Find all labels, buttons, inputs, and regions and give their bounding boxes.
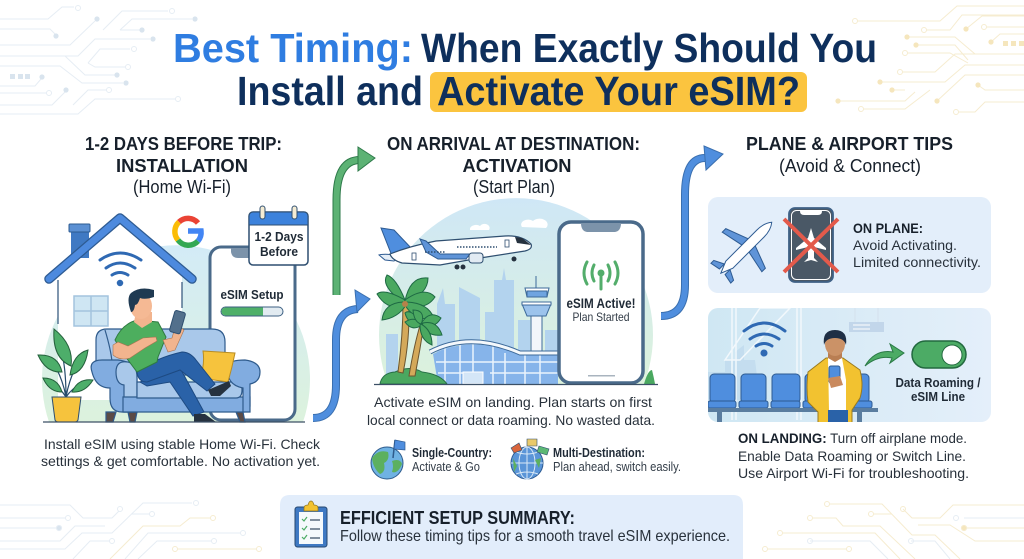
text: installation description: settings & get comfortable. No activation yet. bbox=[41, 453, 320, 469]
text: multi-destination: Multi-Destination: bbox=[553, 446, 645, 460]
heading: installation column: INSTALLATION bbox=[116, 156, 248, 176]
phone: eSIM active: eSIM Active! bbox=[566, 296, 636, 311]
arrow: green curve to toggle bbox=[865, 344, 904, 366]
panel: on plane: Limited connectivity. bbox=[853, 254, 981, 270]
text: on landing description: Use Airport Wi-Fi for troubleshooting. bbox=[738, 465, 969, 481]
icon: phone crossed out bbox=[784, 208, 838, 282]
panel: efficient setup summary: EFFICIENT SETUP SUMMARY: bbox=[340, 508, 575, 528]
icon: clipboard checklist bbox=[295, 501, 327, 547]
title: Best Timing: bbox=[173, 25, 413, 71]
heading: activation column: ON ARRIVAL AT DESTINATION: bbox=[387, 134, 640, 154]
panel: on landing: Data Roaming / bbox=[896, 376, 981, 390]
text: multi-destination: Plan ahead, switch easily. bbox=[553, 460, 681, 474]
text: single-country: Single-Country: bbox=[412, 446, 492, 460]
airport tower bbox=[522, 276, 551, 360]
heading: plane and airport tips column: PLANE & AIRPORT TIPS bbox=[746, 134, 953, 154]
text: activation description: local connect or data roaming. No wasted data. bbox=[367, 412, 655, 428]
panel: on landing: eSIM Line bbox=[911, 390, 965, 404]
palm trees and bushes bbox=[377, 275, 655, 384]
icon: wifi bbox=[744, 323, 785, 356]
text: installation description: Install eSIM using stable Home Wi-Fi. Check bbox=[44, 436, 321, 452]
text: on landing description bbox=[738, 430, 969, 481]
title: Activate Your eSIM? bbox=[437, 68, 800, 114]
text: activation description bbox=[367, 394, 655, 428]
panel: on plane: ON PLANE: bbox=[853, 220, 923, 236]
title: Install and bbox=[237, 68, 423, 114]
illustration: home installation scene bbox=[38, 206, 310, 422]
heading: activation column: ACTIVATION bbox=[462, 156, 572, 176]
illustration: airport arrival scene bbox=[374, 198, 658, 384]
phone: eSIM setup bbox=[210, 247, 295, 420]
icon: signal antenna bbox=[584, 262, 618, 289]
icon: yellow pillow bbox=[200, 351, 235, 382]
person sitting with phone bbox=[113, 289, 231, 422]
icon: Google G logo bbox=[175, 218, 201, 245]
plant in yellow pot bbox=[38, 329, 93, 422]
panel: on plane: Avoid Activating. bbox=[853, 237, 957, 253]
person with phone bbox=[807, 330, 862, 424]
icon: airplane bbox=[701, 202, 792, 293]
phone: eSIM setup: eSIM Setup bbox=[220, 287, 284, 302]
icon: calendar 1-2 days before bbox=[249, 206, 308, 265]
arrow: blue to arrival scene bbox=[313, 290, 370, 418]
icon: wifi bbox=[100, 253, 141, 286]
icon: calendar 1-2 days before: 1-2 Days bbox=[254, 229, 304, 244]
icon: calendar 1-2 days before: Before bbox=[260, 244, 298, 259]
text: single-country: Activate & Go bbox=[412, 460, 480, 474]
icon: single-country globe bbox=[371, 440, 405, 479]
heading: activation column: (Start Plan) bbox=[473, 177, 555, 197]
phone: eSIM active bbox=[559, 222, 643, 383]
icon: multi-destination globe with flags bbox=[511, 439, 549, 479]
panel: on plane bbox=[701, 197, 991, 293]
arrow: blue to airport tips bbox=[661, 146, 723, 316]
arrow: green to activation bbox=[336, 147, 375, 295]
heading: plane and airport tips column bbox=[746, 134, 953, 176]
title: When Exactly Should You bbox=[421, 25, 877, 71]
airport terminal bbox=[430, 340, 560, 384]
text: on landing description: ON LANDING: Turn off airplane mode. bbox=[738, 430, 967, 446]
seats bbox=[708, 374, 872, 408]
icon: toggle switch bbox=[912, 341, 966, 368]
text: activation description: Activate eSIM on landing. Plan starts on first bbox=[374, 394, 652, 410]
heading: installation column: (Home Wi-Fi) bbox=[133, 177, 231, 197]
sofa bbox=[91, 329, 260, 422]
heading: installation column bbox=[85, 134, 282, 197]
text: multi-destination bbox=[553, 446, 681, 474]
text: on landing description: Enable Data Roaming or Switch Line. bbox=[738, 448, 966, 464]
phone: eSIM active: Plan Started bbox=[572, 310, 630, 324]
panel: efficient setup summary bbox=[280, 495, 743, 559]
panel: on landing bbox=[708, 308, 991, 424]
panel: efficient setup summary: Follow these timing tips for a smooth travel eSIM experience. bbox=[340, 528, 730, 545]
heading: installation column: 1-2 DAYS BEFORE TRIP: bbox=[85, 134, 282, 154]
heading: activation column bbox=[387, 134, 640, 197]
text: single-country bbox=[412, 446, 492, 474]
title bbox=[173, 25, 877, 114]
text: installation description bbox=[41, 436, 321, 469]
icon: house bbox=[49, 218, 192, 400]
heading: plane and airport tips column: (Avoid & Connect) bbox=[779, 156, 921, 176]
skyline bbox=[386, 268, 558, 384]
airplane bbox=[379, 228, 531, 270]
